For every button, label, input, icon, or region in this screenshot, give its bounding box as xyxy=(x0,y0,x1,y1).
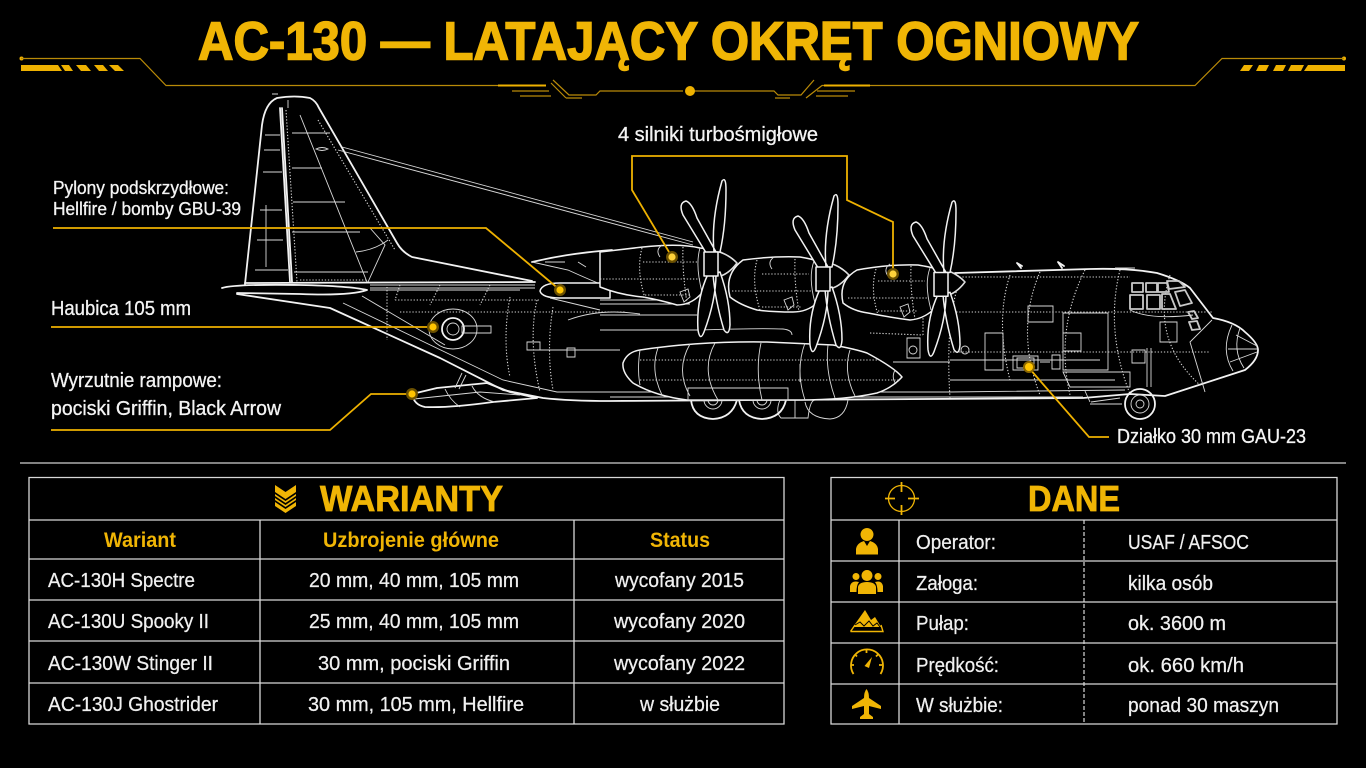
row: operator xyxy=(856,528,1249,554)
callout: pylons xyxy=(53,178,566,296)
panel: variants table xyxy=(29,478,784,724)
table header row: Wariant xyxy=(104,529,176,552)
row: ceiling: ok. 3600 m xyxy=(1128,613,1226,635)
callout: ramp launchers: pociski Griffin, Black Arrow xyxy=(51,398,282,420)
table header row xyxy=(104,529,710,552)
icon: person xyxy=(856,528,878,554)
row: crew: kilka osób xyxy=(1128,573,1213,595)
row: AC-130J: AC-130J Ghostrider xyxy=(48,694,218,716)
tail fin xyxy=(245,94,693,284)
table header row: Uzbrojenie główne xyxy=(323,529,499,552)
engine 1 xyxy=(600,180,737,337)
cockpit windows xyxy=(1130,281,1258,392)
row: speed: ok. 660 km/h xyxy=(1128,655,1244,677)
row: AC-130J: w służbie xyxy=(639,694,720,716)
row: AC-130W xyxy=(48,653,745,675)
title: AC-130 — LATAJĄCY OKRĘT OGNIOWY xyxy=(198,12,1139,72)
row: AC-130U: 25 mm, 40 mm, 105 mm xyxy=(309,611,519,633)
main landing gear xyxy=(691,391,848,419)
callout: ramp launchers: Wyrzutnie rampowe: xyxy=(51,370,222,392)
row: ceiling: Pułap: xyxy=(916,613,969,635)
row: crew xyxy=(850,570,1213,595)
callout: pylons: Pylony podskrzydłowe: xyxy=(53,178,229,198)
fuselage xyxy=(222,262,1258,401)
row: speed xyxy=(851,649,1244,677)
callout: 30 mm cannon: Działko 30 mm GAU-23 xyxy=(1117,426,1306,448)
row: in service: W służbie: xyxy=(916,695,1003,717)
heading: variants: WARIANTY xyxy=(320,478,503,519)
panel: data table xyxy=(831,478,1337,724)
callout: ramp launchers xyxy=(51,370,418,430)
row: AC-130J xyxy=(48,694,720,716)
icon: gauge xyxy=(851,649,883,674)
engine 2 xyxy=(729,195,849,352)
row: AC-130W: 30 mm, pociski Griffin xyxy=(318,653,510,675)
callout: howitzer: Haubica 105 mm xyxy=(51,298,191,320)
row: AC-130H: 20 mm, 40 mm, 105 mm xyxy=(309,570,519,592)
section divider xyxy=(20,462,1346,464)
callout: pylons: Hellfire / bomby GBU-39 xyxy=(53,199,241,219)
callout: howitzer xyxy=(51,298,439,333)
row: operator: USAF / AFSOC xyxy=(1128,532,1249,554)
icon: mountain xyxy=(850,610,883,632)
callout: engines: 4 silniki turbośmigłowe xyxy=(618,124,818,146)
row: in service xyxy=(852,689,1279,719)
row: AC-130U: AC-130U Spooky II xyxy=(48,611,209,633)
aircraft blueprint xyxy=(222,94,1258,419)
rear ramp launcher xyxy=(412,373,537,407)
heading: data: DANE xyxy=(1028,478,1120,519)
wing pylon and pods xyxy=(532,250,690,320)
icon: plane xyxy=(852,689,881,719)
row: AC-130H: AC-130H Spectre xyxy=(48,570,195,592)
icon: crew xyxy=(850,570,883,594)
callout: engines xyxy=(618,124,899,280)
row: crew: Załoga: xyxy=(916,573,978,595)
row: speed: Prędkość: xyxy=(916,655,999,677)
row: AC-130H: wycofany 2015 xyxy=(614,570,744,592)
callout: 30 mm cannon xyxy=(1023,361,1306,448)
row: AC-130U: wycofany 2020 xyxy=(613,611,745,633)
row: AC-130W: wycofany 2022 xyxy=(613,653,745,675)
icon: chevrons xyxy=(275,485,296,513)
nose landing gear xyxy=(1085,389,1155,419)
engine 3 xyxy=(842,201,965,356)
icon: crosshair xyxy=(885,482,919,515)
row: in service: ponad 30 maszyn xyxy=(1128,695,1279,717)
header ornament xyxy=(20,56,1346,98)
row: operator: Operator: xyxy=(916,532,996,554)
row: AC-130J: 30 mm, 105 mm, Hellfire xyxy=(308,694,524,716)
external fuel tank sponson xyxy=(623,342,902,400)
row: AC-130H xyxy=(48,570,744,592)
row: ceiling xyxy=(850,610,1226,635)
row: AC-130U xyxy=(48,611,745,633)
table header row: Status xyxy=(650,529,710,552)
row: AC-130W: AC-130W Stinger II xyxy=(48,653,213,675)
